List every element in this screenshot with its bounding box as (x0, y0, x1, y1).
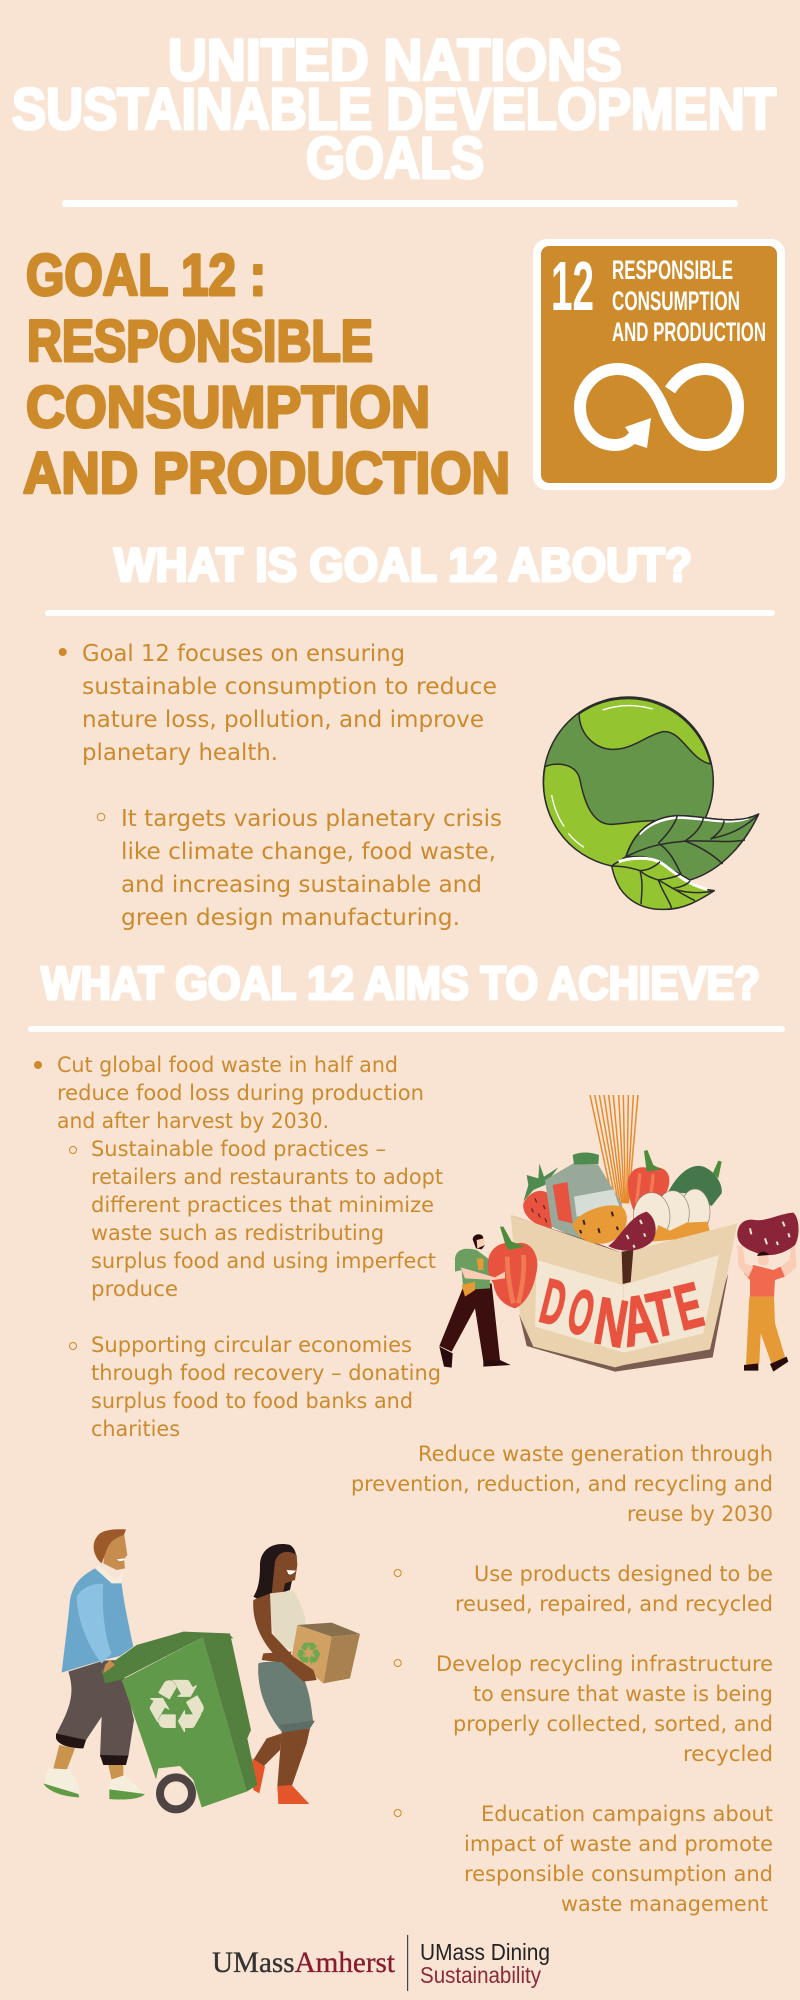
text block: reduce waste aims: Use products designed to be (474, 1562, 773, 1586)
text block: food waste aims: charities (91, 1417, 180, 1441)
person: woman with box (252, 1544, 360, 1804)
heading: goal 12: RESPONSIBLE (27, 309, 373, 374)
text block: reduce waste aims: waste management (561, 1892, 768, 1916)
box faces (511, 1215, 737, 1367)
spaghetti (590, 1095, 638, 1203)
text: DONATE: A (617, 1281, 661, 1362)
text block: reduce waste aims (351, 1442, 773, 1916)
potatoes (572, 1205, 656, 1251)
title: UNITED NATIONS (168, 28, 622, 93)
title (12, 28, 776, 191)
text block: food waste aims: Supporting circular economies (91, 1333, 412, 1357)
text: DONATE: E (668, 1270, 710, 1345)
heading: goal 12 (23, 243, 510, 506)
text block: about goal 12: like climate change, food waste, (121, 839, 496, 865)
text block: about goal 12: green design manufacturing. (121, 905, 460, 931)
text block: reduce waste aims: recycled (683, 1742, 773, 1766)
text: DONATE (534, 1265, 710, 1362)
icon: SDG 12 badge: RESPONSIBLE (612, 255, 733, 285)
text block: food waste aims: surplus food and using imperfect (91, 1249, 436, 1273)
text block: food waste aims: Sustainable food practices – (91, 1137, 386, 1161)
person: man pushing bin (43, 1529, 145, 1799)
heading: what is goal 12 about: WHAT IS GOAL 12 ABOUT? (114, 538, 692, 591)
strawberry (523, 1163, 558, 1229)
logo: UMass Amherst and UMass Dining Sustainability: Sustainability (420, 1962, 541, 1988)
text block: about goal 12: It targets various planetary crisis (121, 806, 502, 832)
text block: food waste aims: produce (91, 1277, 178, 1301)
text block: reduce waste aims: Develop recycling infrastructure (436, 1652, 773, 1676)
text block: reduce waste aims: impact of waste and promote (464, 1832, 773, 1856)
text block: reduce waste aims: reuse by 2030 (627, 1502, 773, 1526)
text block: reduce waste aims: Reduce waste generation through (418, 1442, 773, 1466)
text block: about goal 12: nature loss, pollution, and improve (82, 707, 484, 733)
heading: goal 12: AND PRODUCTION (23, 441, 510, 506)
text block: reduce waste aims: to ensure that waste is being (473, 1682, 773, 1706)
logo: UMass Amherst and UMass Dining Sustainability: UMassAmherst (212, 1946, 396, 1979)
text block: food waste aims: Cut global food waste in half and (57, 1053, 398, 1077)
text block: reduce waste aims: properly collected, sorted, and (453, 1712, 773, 1736)
text block: food waste aims: and after harvest by 2030. (57, 1109, 329, 1133)
text block: food waste aims: reduce food loss during production (57, 1081, 424, 1105)
text block: reduce waste aims: Education campaigns about (481, 1802, 773, 1826)
heading: goal 12: GOAL 12 : (26, 243, 266, 308)
heading: goal 12: CONSUMPTION (26, 375, 430, 440)
text block: food waste aims: surplus food to food banks and (91, 1389, 413, 1413)
box shadow (519, 1273, 728, 1372)
title: GOALS (306, 126, 484, 191)
text: DONATE: O (561, 1275, 601, 1350)
logo: UMass Amherst and UMass Dining Sustainability: UMass Dining (420, 1939, 550, 1965)
person: right man with potato (737, 1213, 799, 1372)
icon: SDG 12 badge (533, 239, 785, 490)
person: woman with box: ♻ (295, 1637, 322, 1672)
text block: food waste aims: through food recovery – donating (91, 1361, 441, 1385)
text block: reduce waste aims: reused, repaired, and recycled (455, 1592, 773, 1616)
illustration: people with recycling bin (43, 1529, 360, 1809)
text: DONATE: N (590, 1283, 633, 1362)
text block: food waste aims: different practices that minimize (91, 1193, 434, 1217)
jug (545, 1152, 624, 1240)
recycling bin: ♻ (144, 1665, 209, 1749)
text block: about goal 12 (59, 641, 502, 931)
eggs (633, 1189, 710, 1241)
text block: reduce waste aims: prevention, reduction, and recycling and (351, 1472, 773, 1496)
icon: globe with leaves (543, 697, 759, 909)
text block: about goal 12: and increasing sustainable and (121, 872, 482, 898)
logo: UMass Amherst and UMass Dining Sustainability (212, 1935, 550, 1991)
text block: reduce waste aims: responsible consumption and (464, 1862, 773, 1886)
icon: SDG 12 badge: 12 (551, 247, 594, 325)
box label panels (535, 1260, 624, 1353)
text block: about goal 12: sustainable consumption to reduce (82, 674, 497, 700)
text: DONATE: T (641, 1277, 682, 1351)
text block: food waste aims (34, 1053, 443, 1441)
text block: about goal 12: Goal 12 focuses on ensuring (82, 641, 405, 667)
recycling bin (102, 1632, 257, 1809)
red pepper (628, 1150, 669, 1210)
text block: food waste aims: retailers and restaurants to adopt (91, 1165, 443, 1189)
illustration: donate box with people (439, 1095, 799, 1372)
text: DONATE: D (534, 1265, 573, 1340)
green pepper (668, 1161, 722, 1206)
text block: about goal 12: planetary health. (82, 740, 278, 766)
person: left man with pepper (439, 1227, 537, 1368)
text block: food waste aims: waste such as redistributing (91, 1221, 384, 1245)
